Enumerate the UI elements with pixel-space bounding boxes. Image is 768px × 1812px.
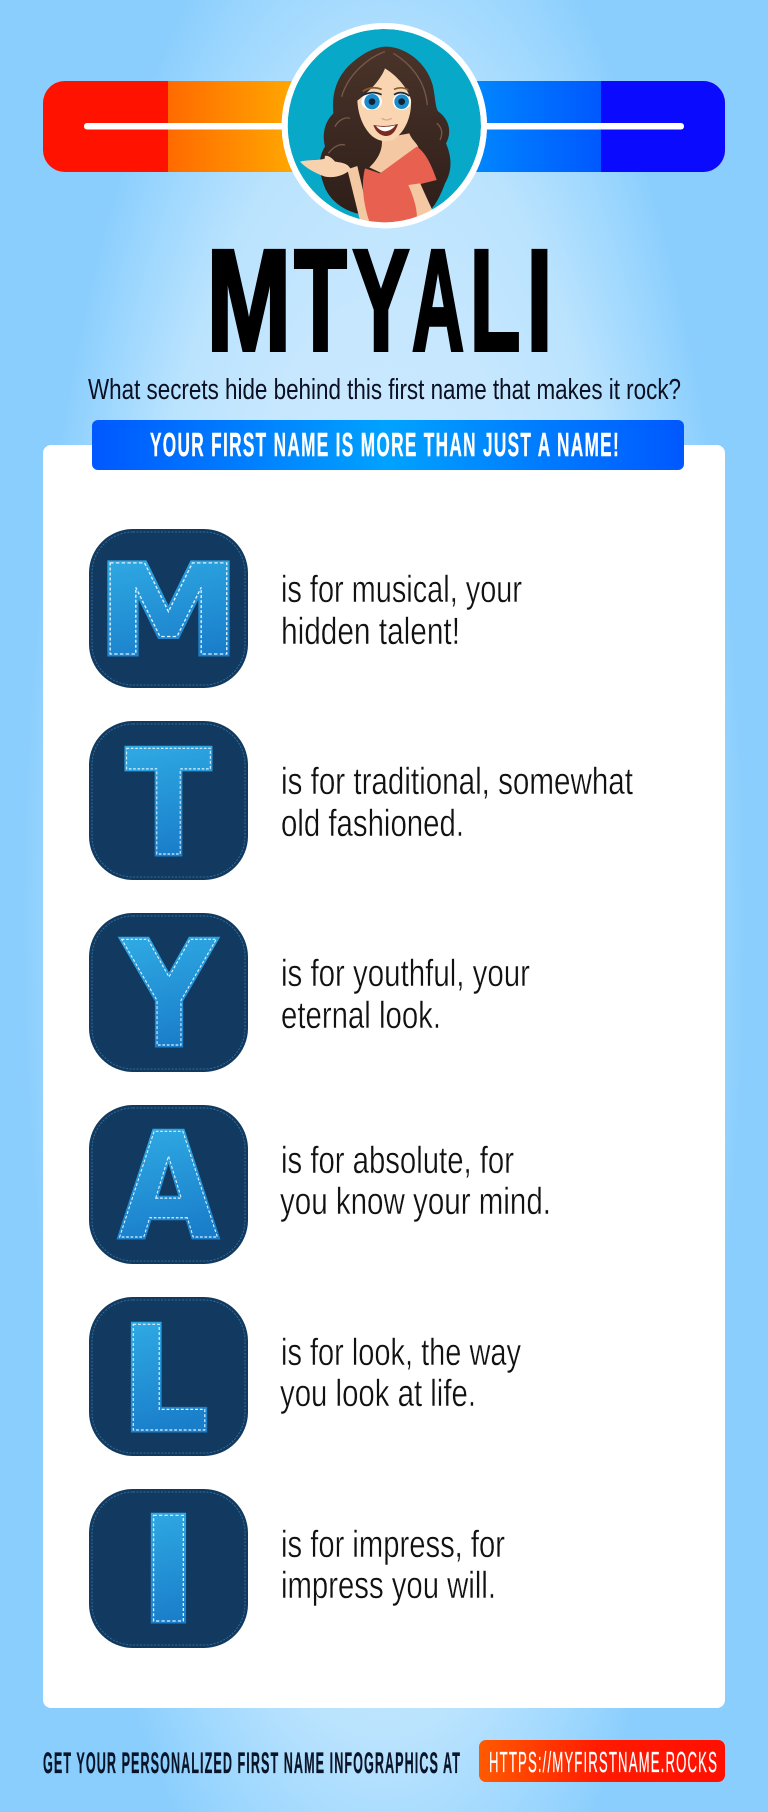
- title: L: [470, 220, 520, 381]
- text: I: impress you will.: [281, 1565, 496, 1607]
- text: T: is for traditional, somewhat: [281, 761, 633, 803]
- title: Y: [353, 220, 409, 381]
- icon: letter A: A: [119, 1103, 218, 1272]
- text: L: [280, 1332, 521, 1415]
- icon: letter Y: Y: [121, 911, 217, 1080]
- text: M: [281, 569, 522, 653]
- header gradient bar: [43, 81, 725, 172]
- text: L: is for look, the way: [281, 1332, 521, 1374]
- banner: [92, 420, 684, 470]
- text: M: hidden talent!: [281, 611, 460, 653]
- row: I: [89, 1487, 505, 1656]
- text: A: [280, 1140, 551, 1223]
- text: A: you know your mind.: [280, 1181, 551, 1223]
- text: I: [281, 1524, 505, 1607]
- icon: letter A: A: [119, 1103, 218, 1272]
- icon: letter L: L: [121, 1296, 209, 1465]
- row: T: [89, 720, 633, 889]
- row: A: [89, 1103, 551, 1272]
- text: L: you look at life.: [280, 1373, 476, 1415]
- panel: white content card: [43, 445, 725, 1708]
- text: A: is for absolute, for: [281, 1140, 514, 1182]
- row: L: [89, 1296, 521, 1465]
- icon: letter L: L: [121, 1296, 209, 1465]
- icon: letter T: T: [126, 720, 211, 889]
- icon: letter Y: [89, 911, 248, 1080]
- icon: letter L: [89, 1296, 248, 1465]
- title: A: [412, 220, 464, 381]
- icon: letter T: [89, 720, 248, 889]
- icon: letter M: M: [97, 539, 240, 684]
- row: Y: [89, 911, 530, 1080]
- footer url button: [479, 1740, 725, 1782]
- row: M: [89, 529, 522, 688]
- text: Y: [281, 953, 530, 1037]
- text: M: is for musical, your: [281, 569, 522, 611]
- title: I: [527, 220, 552, 381]
- text: T: [281, 761, 633, 845]
- icon: letter M: M: [97, 539, 240, 684]
- text: Y: is for youthful, your: [281, 953, 530, 995]
- text: Y: eternal look.: [281, 995, 441, 1037]
- icon: letter I: [89, 1487, 248, 1656]
- icon: letter I: I: [139, 1487, 198, 1656]
- icon: woman portrait: [285, 26, 484, 225]
- text: T: old fashioned.: [281, 803, 464, 845]
- title: T: [294, 220, 347, 381]
- text: I: is for impress, for: [281, 1524, 505, 1566]
- icon: letter T: T: [126, 720, 211, 889]
- icon: letter I: I: [139, 1487, 198, 1656]
- title: M: [207, 220, 291, 381]
- icon: letter Y: Y: [121, 911, 217, 1080]
